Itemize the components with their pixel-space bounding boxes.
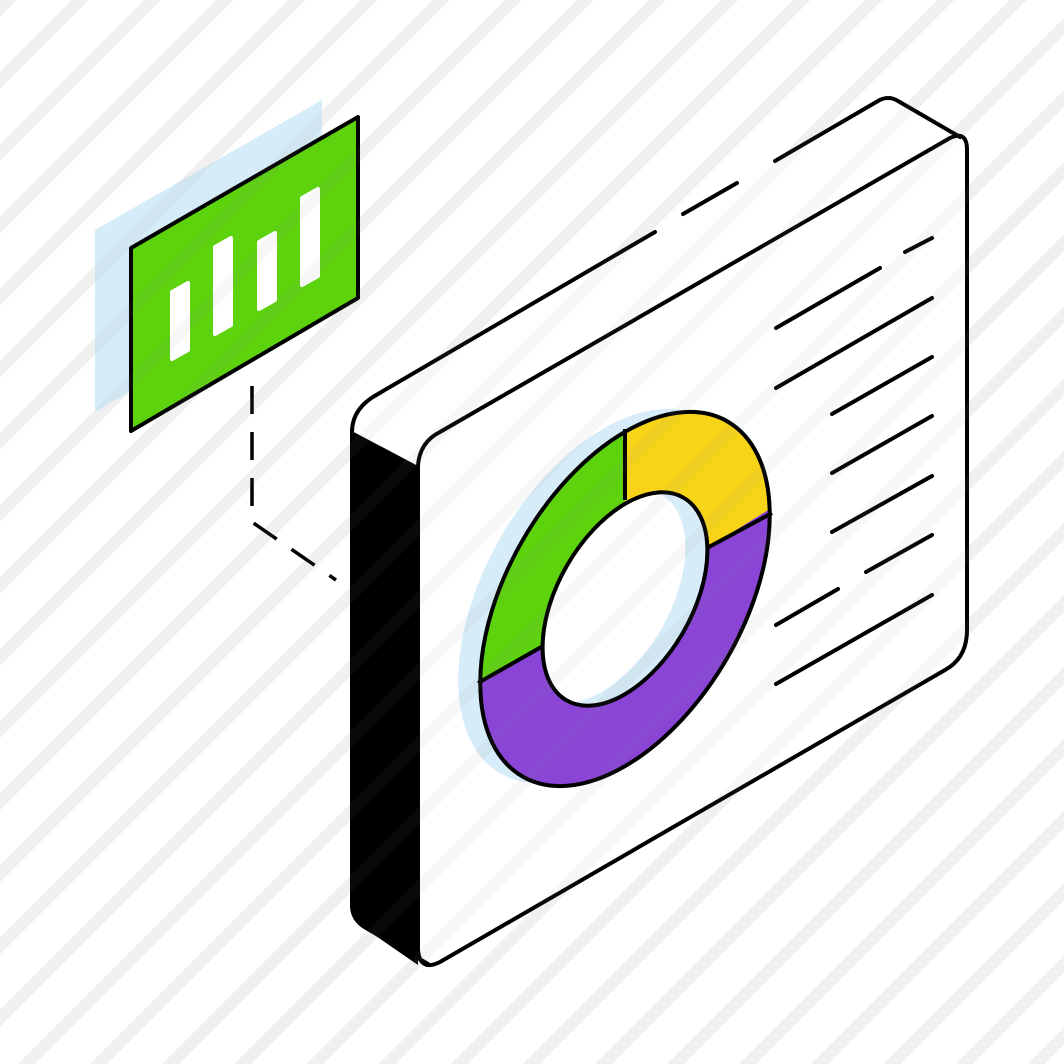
- board front face: [418, 136, 967, 965]
- green bar chart card: [95, 100, 358, 431]
- board: [350, 98, 967, 965]
- donut shadow: [458, 408, 706, 783]
- board outline: [352, 98, 960, 964]
- text lines: [776, 238, 932, 684]
- dashed connector: [252, 386, 336, 580]
- donut chart: [458, 408, 773, 788]
